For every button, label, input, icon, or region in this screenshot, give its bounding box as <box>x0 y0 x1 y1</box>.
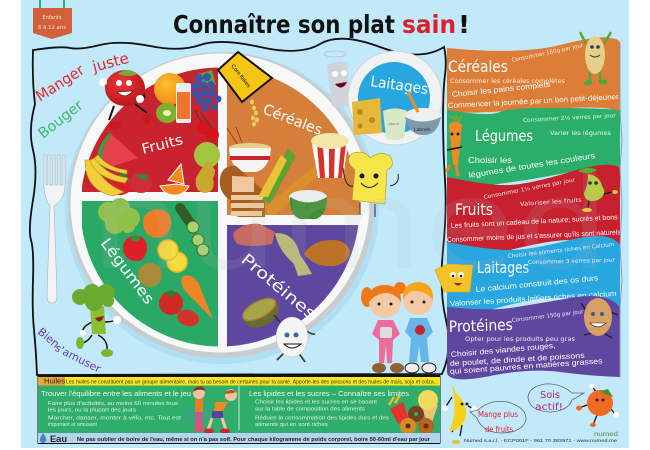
legumes food group <box>72 198 213 357</box>
orange <box>154 73 186 105</box>
juice glass <box>176 83 191 123</box>
panel: legumes: Consommer 2½ verres par jour <box>523 112 617 124</box>
balance panel <box>38 386 440 434</box>
water strip <box>38 433 440 444</box>
apple character <box>99 70 151 129</box>
panel: cereales: Céréales <box>448 57 508 76</box>
panel: laitages: Le calcium construit des os durs <box>475 273 599 294</box>
dairy plate <box>348 51 442 145</box>
panel: cereales: Consommer 180g par jour <box>511 43 585 64</box>
balance panel: important et amusant <box>48 422 97 428</box>
speech bubble: mange plus de fruits: Mange plus <box>478 410 518 419</box>
panel: fruits: Valoriser les fruits <box>520 198 582 208</box>
lentil bowl <box>238 293 284 333</box>
panel: cereales: Choisir les pains complets <box>451 80 551 99</box>
age badge: 6 à 12 ans <box>38 24 66 31</box>
banana character <box>442 385 477 444</box>
section: proteines <box>227 225 360 350</box>
egg character <box>581 298 618 338</box>
balance panel: Marcher, danser, monter à vélo, etc. Tout est <box>48 416 182 422</box>
panel: legumes: légumes de toutes les couleurs <box>468 151 596 180</box>
kiwi <box>156 103 178 123</box>
proteines label: Protéines <box>237 250 320 323</box>
milk glass character <box>324 51 350 107</box>
girl <box>361 282 406 373</box>
panel: fruits: Les fruits sont un cadeau de la nature; sucrés et bons <box>451 214 618 230</box>
publisher credit: Numed s.a.r.l. - ECP001F - 961 70 382971 - www.numed.me <box>464 438 617 444</box>
numed logo: numed <box>594 432 618 438</box>
lemons <box>158 240 187 272</box>
bread loaf <box>220 166 265 217</box>
carrot <box>182 275 213 319</box>
green apple <box>194 142 220 168</box>
panel: laitages: Consommer 3 verres par jour <box>528 258 616 266</box>
panel: laitages: Laitages <box>477 258 529 277</box>
tomato half <box>175 307 201 329</box>
grains <box>250 100 259 126</box>
panel: fruits: Consommer moins de jus et s'assurer qu'ils sont naturels <box>447 229 621 244</box>
oils strip <box>38 377 440 386</box>
slogan: manger juste: Manger <box>32 60 88 105</box>
watermelon <box>98 133 138 169</box>
panel: proteines: de poulet, de dinde et de poissons <box>450 351 585 368</box>
baguette <box>265 157 329 215</box>
panel: proteines: qui soient pauvres en matières grasses <box>450 356 603 376</box>
orange character <box>576 384 619 427</box>
egg character <box>274 315 315 362</box>
fork <box>44 155 65 303</box>
cereales label: Céréales <box>261 102 324 139</box>
cereal box: Corn flakes <box>229 64 251 89</box>
panel: fruits: Consommer 1½ verres par jour <box>483 176 576 201</box>
panel: cereales <box>447 32 620 113</box>
panel: fruits <box>447 165 621 254</box>
balance panel: Choisir les lipides et les sucres en se basant <box>255 400 377 406</box>
cherries <box>195 110 219 142</box>
fruits label: Fruits <box>140 132 185 158</box>
meat <box>234 224 275 246</box>
speech bubble: sois actif: Sois <box>540 390 560 401</box>
fish <box>275 233 312 276</box>
water strip: Ne pas oublier de boire de l'eau, même si on n'a pas soif. Pour chaque kilogramme de poids corporel, boire 50-60ml d'eau par jour <box>77 437 430 443</box>
orange slice <box>160 164 189 195</box>
bottom information box <box>38 375 440 444</box>
oils strip: Huiles <box>44 378 66 386</box>
cheese <box>352 98 382 135</box>
slogan: manger juste: juste <box>89 49 131 76</box>
slogan: manger juste <box>32 49 131 105</box>
speech bubble: sois actif <box>528 384 584 413</box>
panel: fruits: Fruits <box>455 200 493 219</box>
panel: cereales: Commencer la journée par un bon petit-déjeuner <box>448 92 619 110</box>
watermark: numed <box>90 153 610 298</box>
panel: proteines: Protéines <box>449 316 513 336</box>
panel: laitages: Choisir les aliments riches en Calcium <box>508 242 615 260</box>
panel: proteines <box>447 296 620 379</box>
slogan: bien s'amuser: Bien <box>35 325 62 351</box>
popcorn <box>311 133 349 178</box>
balance panel: Les lipides et les sucres – Connaître ses limites <box>249 389 409 398</box>
panel: legumes: Choisir les <box>468 156 512 165</box>
yogurt: yaourt <box>388 122 400 126</box>
boy <box>403 282 436 373</box>
balance panel: aliments qui en sont riches <box>255 422 328 428</box>
panel: legumes: Légumes <box>475 127 533 145</box>
toast character <box>343 152 398 217</box>
panel: laitages <box>435 236 620 315</box>
balance panel: Trouver l'équilibre entre les aliments et le jeu <box>41 389 191 398</box>
legumes label: Légumes <box>97 235 158 308</box>
onion <box>138 263 162 287</box>
bananas <box>85 155 128 196</box>
cereales food group <box>218 51 442 219</box>
strawberries <box>108 173 152 195</box>
carrot character <box>446 113 463 176</box>
exercising kids <box>187 387 237 434</box>
orange pepper <box>143 209 171 238</box>
broccoli character <box>72 284 121 357</box>
slogan: bouger: Bouger <box>36 98 86 142</box>
red pepper <box>123 235 147 261</box>
balance panel: les jours, ou la plupart des jours <box>48 408 136 414</box>
plate <box>65 52 379 364</box>
balance panel: Réduire la consommation des lipides durs et des <box>255 416 389 422</box>
section: legumes <box>82 201 218 351</box>
panel: proteines: Consommer 150g par jour <box>512 309 584 324</box>
section: cereales <box>227 78 360 215</box>
proteines food group <box>234 224 350 362</box>
tomato <box>159 290 183 315</box>
title: Connaître son plat <box>173 10 395 39</box>
potato character <box>580 32 611 86</box>
water strip: Eau <box>50 434 67 444</box>
snacks <box>389 390 438 434</box>
cucumber <box>180 208 209 256</box>
speech bubble: sois actif: actif! <box>535 402 563 413</box>
speech bubble: mange plus de fruits: de fruits <box>485 425 513 434</box>
panel: legumes <box>446 108 621 186</box>
pear character <box>578 168 618 212</box>
chicken <box>304 240 350 266</box>
children <box>361 282 436 373</box>
slogan: bien s'amuser: s'amuser <box>53 342 103 376</box>
balance panel: sur la table de composition des aliments <box>255 406 365 412</box>
corn <box>258 148 296 204</box>
title: ! <box>458 10 470 39</box>
cereal box <box>218 52 272 102</box>
cheese character <box>435 264 473 292</box>
panel: cereales: Consommer les céréales complètes <box>450 77 566 85</box>
slogan: bien s'amuser <box>35 325 103 376</box>
oils strip: Les huiles ne constituent pas un groupe alimentaire, mais tu as besoin de certaines pour ta santé. Apporte-les des poissons et des huiles de maïs, soja et colza... <box>66 379 438 385</box>
grapes <box>191 70 222 112</box>
panel: laitages: Valoriser les produits laitiers riches en calcium <box>450 289 617 308</box>
panel edge shadow <box>620 43 622 377</box>
section: fruits <box>82 60 218 192</box>
labneh bowl: Labneh <box>414 127 431 133</box>
panel: legumes: Varier les légumes <box>550 130 611 137</box>
panel: proteines: Opter pour les produits peu gras <box>465 337 575 343</box>
age badge: Enfants <box>42 15 62 21</box>
fruits food group <box>85 70 222 196</box>
balance panel: Faire plus d'activités, au moins 60 minutes tous <box>48 401 178 407</box>
title: sain <box>402 10 456 39</box>
laitages label: Laitages <box>369 74 429 98</box>
lettuce <box>98 198 140 234</box>
rice bowl <box>289 190 327 219</box>
panel: proteines: Choisir des viandes rouges, <box>450 341 556 359</box>
pear <box>196 160 215 193</box>
plate frame <box>30 39 449 375</box>
speech bubble: mange plus de fruits <box>470 401 526 434</box>
age badge <box>33 0 72 39</box>
noodle bowl <box>227 127 271 172</box>
